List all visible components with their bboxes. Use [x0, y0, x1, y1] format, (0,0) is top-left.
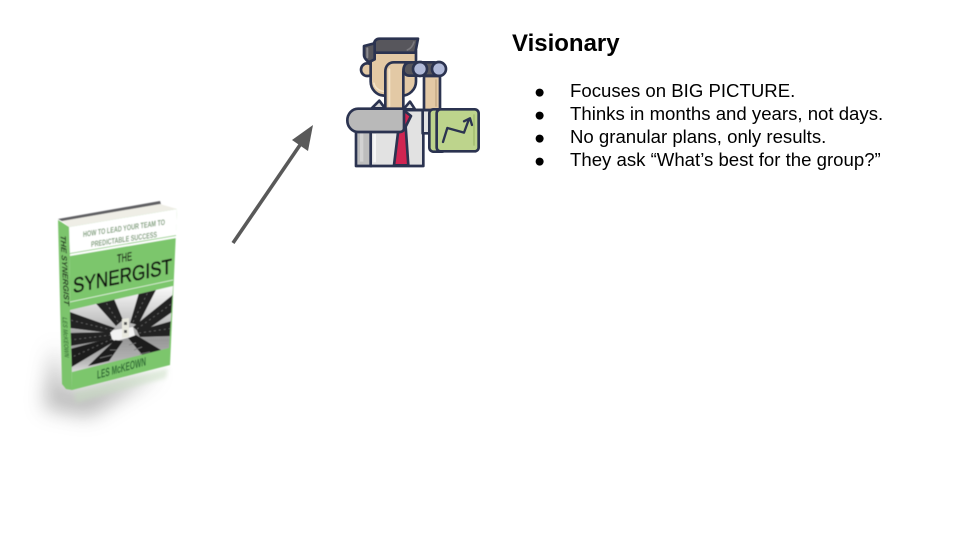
arrow: [233, 125, 313, 243]
cover white band: [69, 209, 177, 256]
tie: [394, 110, 411, 165]
bullet list: ●: [534, 127, 545, 148]
heading: Visionary: [512, 30, 620, 57]
icon: businessman with binoculars and chart: [347, 39, 479, 166]
title: The: THE: [117, 249, 132, 266]
book body: [58, 201, 177, 390]
chart line: [443, 120, 469, 142]
spine: [58, 220, 72, 390]
book shadow: [44, 345, 168, 416]
spine title: THE SYNERGIST: [59, 235, 71, 308]
front cover: [69, 209, 177, 390]
head: [361, 39, 418, 96]
raised arms: [385, 62, 440, 110]
bullet list: ●: [534, 104, 545, 125]
title: Synergist: SYNERGIST: [73, 255, 172, 298]
spine author: LES McKEOWN: [61, 317, 70, 358]
bullet list: [534, 80, 883, 171]
bullet list: ●: [534, 81, 545, 102]
bullet list: They ask “What’s best for the group?”: [570, 149, 881, 170]
author name: LES McKEOWN: [97, 354, 146, 382]
bullet list: ●: [534, 150, 545, 171]
top pages: [58, 201, 162, 225]
sleeve: [347, 109, 404, 132]
bullet list: Thinks in months and years, not days.: [570, 103, 883, 124]
icon: book The Synergist: [44, 201, 177, 416]
bullet list: Focuses on BIG PICTURE.: [570, 80, 795, 101]
binoculars: [403, 62, 446, 76]
shirt: [356, 101, 431, 166]
bullet list: No granular plans, only results.: [570, 126, 826, 147]
chart folder: [429, 109, 479, 152]
cover photo: radiating dominoes: [68, 284, 175, 374]
subtitle: HOW TO LEAD YOUR TEAM TO: [83, 218, 165, 239]
subtitle line two: PREDICTABLE SUCCESS: [91, 230, 157, 249]
